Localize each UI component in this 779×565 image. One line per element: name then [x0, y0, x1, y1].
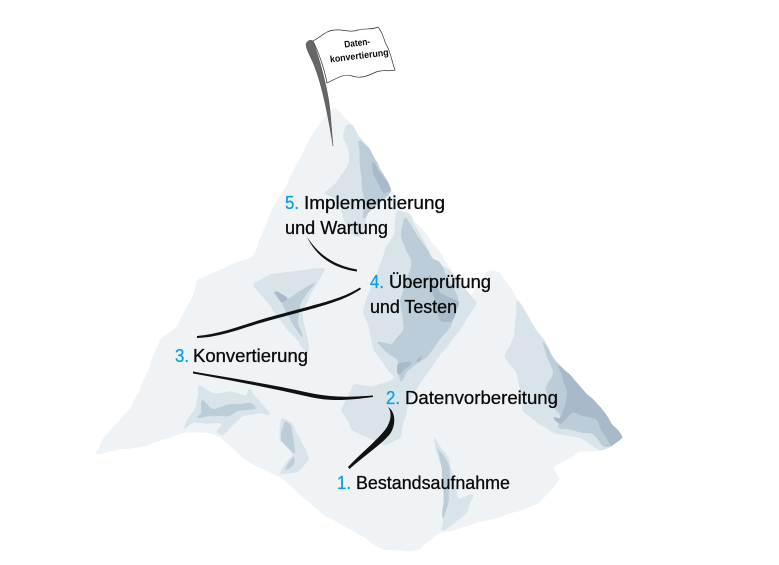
- mountain silhouette: [93, 107, 623, 550]
- flag pole: [306, 40, 333, 146]
- flag: [306, 27, 395, 146]
- label 4: und Testen: [370, 296, 457, 317]
- label 5: [285, 192, 445, 238]
- bottom crevasse shadow: [432, 432, 475, 533]
- label 4: 4.: [370, 271, 384, 292]
- label 1: Bestandsaufnahme: [356, 472, 510, 493]
- label 3: Konvertierung: [193, 345, 308, 366]
- label 2: Datenvorbereitung: [405, 387, 558, 408]
- label 5: und Wartung: [285, 217, 388, 238]
- lower left shadow: [178, 383, 273, 437]
- central glacier shadow: [340, 210, 477, 447]
- label 2: 2.: [386, 387, 400, 408]
- connector line 5 to 4: [307, 237, 357, 272]
- label 4: Überprüfung: [389, 271, 491, 292]
- label 4: [370, 271, 491, 317]
- flag label: [328, 34, 389, 65]
- connector line 4 to 3: [197, 288, 361, 338]
- label 5: Implementierung: [304, 192, 445, 213]
- peak shadow: [323, 124, 392, 238]
- right ridge shadow: [503, 297, 623, 450]
- flag label: Daten-: [344, 37, 371, 51]
- lower middle shadow: [277, 417, 310, 475]
- label 5: 5.: [285, 192, 299, 213]
- label 1: 1.: [337, 472, 351, 493]
- flag cloth: [313, 27, 395, 83]
- connector line 3 to 2: [193, 372, 373, 400]
- label 3: 3.: [175, 345, 189, 366]
- mountain: [93, 107, 623, 550]
- connector line 2 to 1: [348, 407, 394, 469]
- flag label: konvertierung: [329, 47, 389, 65]
- upper left shadow: [253, 267, 327, 357]
